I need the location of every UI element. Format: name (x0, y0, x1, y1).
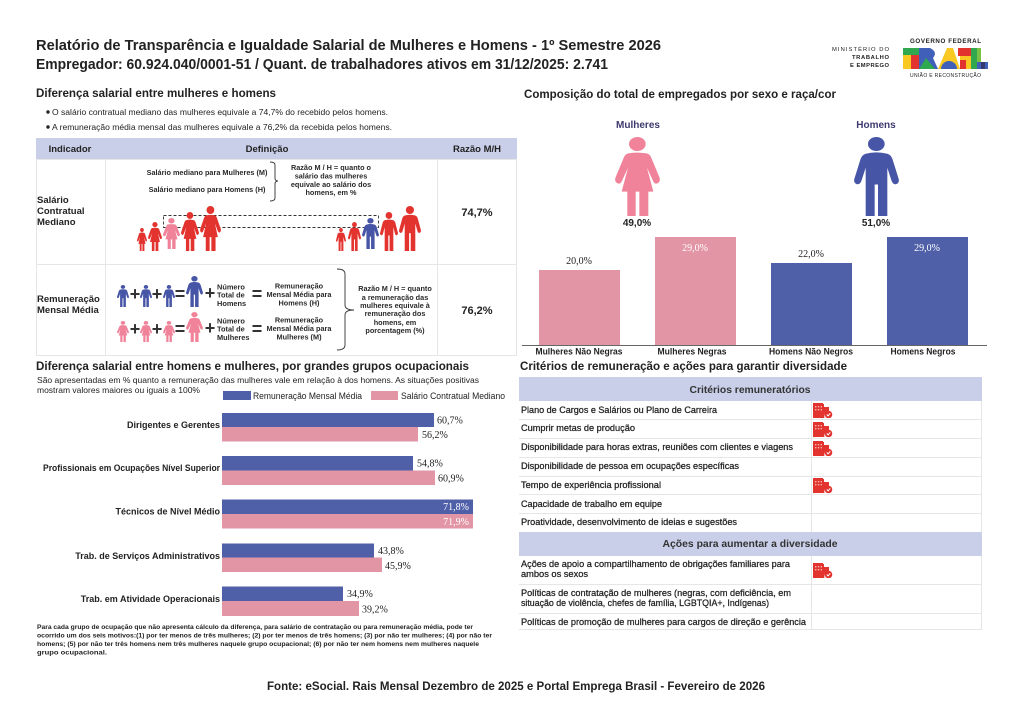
icons: empresa adota critério (813, 403, 832, 493)
equation: men average: + (205, 283, 215, 303)
criteria rows: Disponibilidade para horas extras, reuniões com clientes e viagens (521, 442, 794, 452)
row label: remuneração mensal média (37, 294, 100, 316)
equation: men average: Homens (217, 299, 246, 308)
panel: indicator table (36, 138, 517, 356)
group: serviços administrativos (75, 544, 411, 572)
text block: explicação: São apresentadas em % quanto a remuneração das mulheres vale em relação à dos homens. As situações positivas (37, 375, 479, 385)
heading: critérios: Critérios de remuneração e ações para garantir diversidade (520, 361, 847, 373)
section header: critérios remuneratórios: Critérios remuneratórios (690, 385, 811, 396)
bullet text block (46, 107, 392, 132)
criteria rows (521, 405, 794, 527)
bar chart: raça/cor: Mulheres Negras (658, 346, 727, 356)
icon: mulheres 49,0%: 49,0% (623, 218, 651, 229)
row label: salário contratual mediano: Salário (37, 195, 69, 206)
title: Empregador: 60.924.040/0001-51 / Quant. de trabalhadores ativos em 31/12/2025: 2.741 (36, 57, 608, 73)
heading: composição: Composição do total de empregados por sexo e raça/cor (524, 89, 837, 101)
group: profissionais: Profissionais em Ocupações Nível Superior (43, 463, 220, 473)
legend (223, 391, 505, 401)
definition: razão remuneração: Razão M / H = quanto (358, 284, 432, 293)
equation: men average: = (252, 284, 262, 304)
definition: salário mediano: salário das mulheres (295, 172, 367, 180)
equation: women average: Mulheres (M) (276, 332, 322, 342)
equation: women average: + (205, 318, 215, 338)
equation: women average: + (152, 319, 162, 339)
action rows: ambos os sexos (521, 569, 589, 579)
heading: diferença por grupos ocupacionais: Diferença salarial entre homens e mulheres, por grandes grupos ocupacionais (36, 361, 469, 373)
equation: women average: = (252, 319, 262, 339)
definition: razão remuneração: a remuneração das (362, 293, 428, 302)
section header: ações para diversidade: Ações para aumentar a diversidade (662, 539, 838, 550)
bar chart: raça/cor: Homens Não Negros (769, 346, 853, 356)
equation: men average: Mensal Média para (267, 290, 332, 299)
group: atividade operacional: 34,9% (347, 589, 373, 600)
footnote: homens; (5) por não ter três homens nem três mulheres naquele grupo ocupacional; (6) por não ter nem homens nem mulheres naquele (37, 641, 479, 648)
group: técnicos (115, 500, 473, 528)
action rows: Políticas de promoção de mulheres para cargos de direção e gerência (521, 617, 806, 627)
criteria rows: Capacidade de trabalho em equipe (521, 499, 662, 509)
group: dirigentes e gerentes: Dirigentes e Gerentes (127, 420, 220, 430)
icon: mulheres 49,0% (615, 120, 660, 229)
legend: Salário Contratual Mediano (401, 391, 505, 401)
text block: explicação (37, 375, 479, 395)
group: atividade operacional: Trab. em Atividade Operacionais (81, 594, 220, 604)
group: profissionais: 54,8% (417, 458, 443, 470)
criteria rows: Tempo de experiência profissional (521, 480, 661, 490)
group: dirigentes e gerentes: 56,2% (422, 430, 448, 441)
footnote: ocorrido um dos seis motivos:(1) por ter menos de três mulheres; (2) por ter menos de três homens; (3) por não ter mulheres; (4) por não ter (37, 632, 492, 640)
equation: women average: Mensal Média para (267, 324, 332, 333)
group: dirigentes e gerentes: 60,7% (437, 416, 463, 426)
icon: homens 51,0% (854, 120, 899, 229)
pictogram: women and men ordered by salary (137, 206, 421, 251)
row label: salário contratual mediano: Mediano (37, 217, 76, 228)
bar chart: grupos ocupacionais (43, 413, 473, 616)
equation: women average: = (175, 319, 185, 339)
row label: salário contratual mediano: Contratual (37, 206, 84, 217)
logo: governo federal brasil: GOVERNO FEDERAL (910, 38, 981, 45)
definition: salário mediano: Razão M / H = quanto o (291, 163, 372, 172)
footnote: Para cada grupo de ocupação que não apresenta cálculo da diferença, para salário de contratação ou para remuneração média, pode ter (37, 624, 473, 631)
equation: women average: + (130, 319, 140, 339)
logo: ministério do trabalho e emprego: MINISTÉRIO DO (832, 46, 889, 53)
logo: governo federal brasil (903, 38, 988, 79)
equation: women average: Mulheres (217, 333, 249, 342)
definition: salário mediano (147, 162, 372, 201)
equation: women average: Remuneração (275, 316, 324, 324)
table headers (49, 144, 501, 155)
source: Fonte: eSocial. Rais Mensal Dezembro de 2025 e Portal Emprega Brasil - Fevereiro de 2026 (267, 679, 765, 693)
definition: salário mediano: Salário mediano para Mulheres (M) (147, 168, 268, 177)
logo: ministério do trabalho e emprego: E EMPREGO (850, 63, 889, 69)
definition: salário mediano: Salário mediano para Homens (H) (149, 185, 266, 194)
definition: razão remuneração: mulheres equivale à (360, 301, 431, 310)
group: profissionais: 60,9% (438, 474, 464, 484)
bar chart: raça/cor (522, 237, 987, 356)
definition: razão remuneração (337, 269, 432, 350)
equation: men average: Total de (217, 290, 245, 300)
group: serviços administrativos: 45,9% (385, 561, 411, 572)
bullet text block: A remuneração média mensal das mulheres equivale a 76,2% da recebida pelos homens. (52, 122, 392, 132)
bar chart: raça/cor: Mulheres Não Negras (536, 346, 623, 356)
text block: explicação: mostram valores maiores ou iguais a 100% (37, 385, 200, 395)
group: profissionais (43, 456, 464, 485)
row label: remuneração mensal média: Mensal Média (37, 305, 99, 316)
value: 74,7%: 74,7% (461, 207, 493, 219)
group: atividade operacional (81, 586, 388, 616)
footnote (37, 624, 492, 656)
group: atividade operacional: 39,2% (362, 604, 388, 616)
equation: men average: + (152, 284, 162, 304)
logo: ministério do trabalho e emprego: TRABALHO (852, 55, 889, 61)
action rows: Políticas de contratação de mulheres (negras, com deficiência, em (521, 588, 791, 598)
value: 76,2%: 76,2% (461, 305, 493, 317)
equation: men average: + (130, 284, 140, 304)
footnote: grupo ocupacional. (37, 650, 107, 656)
table headers: Razão M/H (453, 144, 501, 155)
group: dirigentes e gerentes (127, 413, 463, 442)
group: técnicos: Técnicos de Nível Médio (115, 506, 220, 516)
bar chart: raça/cor: 29,0% (914, 243, 940, 254)
icon: mulheres 49,0%: Mulheres (616, 120, 660, 131)
title: Relatório de Transparência e Igualdade Salarial de Mulheres e Homens - 1º Semestre 2026 (36, 38, 661, 54)
legend: Remuneração Mensal Média (253, 391, 362, 401)
definition: salário mediano: homens, em % (305, 188, 357, 197)
table headers: Definição (246, 144, 289, 155)
equation: men average: Remuneração (275, 282, 324, 290)
panel: critérios table (519, 377, 982, 630)
criteria rows: Disponibilidade de pessoa em ocupações específicas (521, 461, 740, 471)
bar chart: raça/cor: 20,0% (566, 256, 592, 267)
bar chart: raça/cor: 29,0% (682, 243, 708, 254)
icon: homens 51,0%: 51,0% (862, 218, 890, 229)
group: técnicos: 71,9% (443, 517, 469, 528)
equation: women average (117, 312, 332, 342)
definition: razão remuneração: remuneração dos (365, 309, 425, 318)
table headers: Indicador (49, 144, 92, 155)
heading: diferença salarial: Diferença salarial entre mulheres e homens (36, 88, 276, 100)
equation: men average: = (175, 284, 185, 304)
logo: governo federal brasil: UNIÃO E RECONSTRUÇÃO (910, 72, 981, 79)
group: serviços administrativos: Trab. de Serviços Administrativos (75, 551, 220, 561)
equation: women average: Número (217, 316, 245, 326)
group: técnicos: 71,8% (443, 502, 469, 513)
equation: men average: Número (217, 282, 245, 292)
icon: empresa adota ação (813, 563, 832, 578)
action rows: Ações de apoio a compartilhamento de obrigações familiares para (521, 559, 790, 569)
definition: razão remuneração: porcentagem (%) (365, 326, 425, 335)
action rows (521, 559, 806, 627)
group: serviços administrativos: 43,8% (378, 546, 404, 557)
bar chart: raça/cor: Homens Negros (890, 346, 956, 356)
row label: remuneração mensal média: Remuneração (37, 294, 100, 305)
bullet text block: O salário contratual mediano das mulheres equivale a 74,7% do recebido pelos homens. (52, 107, 388, 117)
definition: salário mediano: equivale ao salário dos (291, 180, 371, 189)
icon: homens 51,0%: Homens (856, 120, 896, 131)
criteria rows: Proatividade, desenvolvimento de ideias e sugestões (521, 517, 738, 527)
logo: ministério do trabalho e emprego (832, 46, 889, 69)
definition: razão remuneração: homens, em (374, 318, 417, 327)
row label: salário contratual mediano (37, 195, 84, 228)
bar chart: raça/cor: 22,0% (798, 249, 824, 260)
action rows: situação de violência, chefes de família, LGBTQIA+, Indígenas) (521, 598, 769, 608)
equation: women average: Total de (217, 324, 245, 334)
equation: men average: Homens (H) (279, 298, 320, 308)
criteria rows: Cumprir metas de produção (521, 423, 635, 433)
equation: men average (117, 276, 332, 308)
criteria rows: Plano de Cargos e Salários ou Plano de Carreira (521, 405, 717, 415)
title (36, 38, 661, 73)
